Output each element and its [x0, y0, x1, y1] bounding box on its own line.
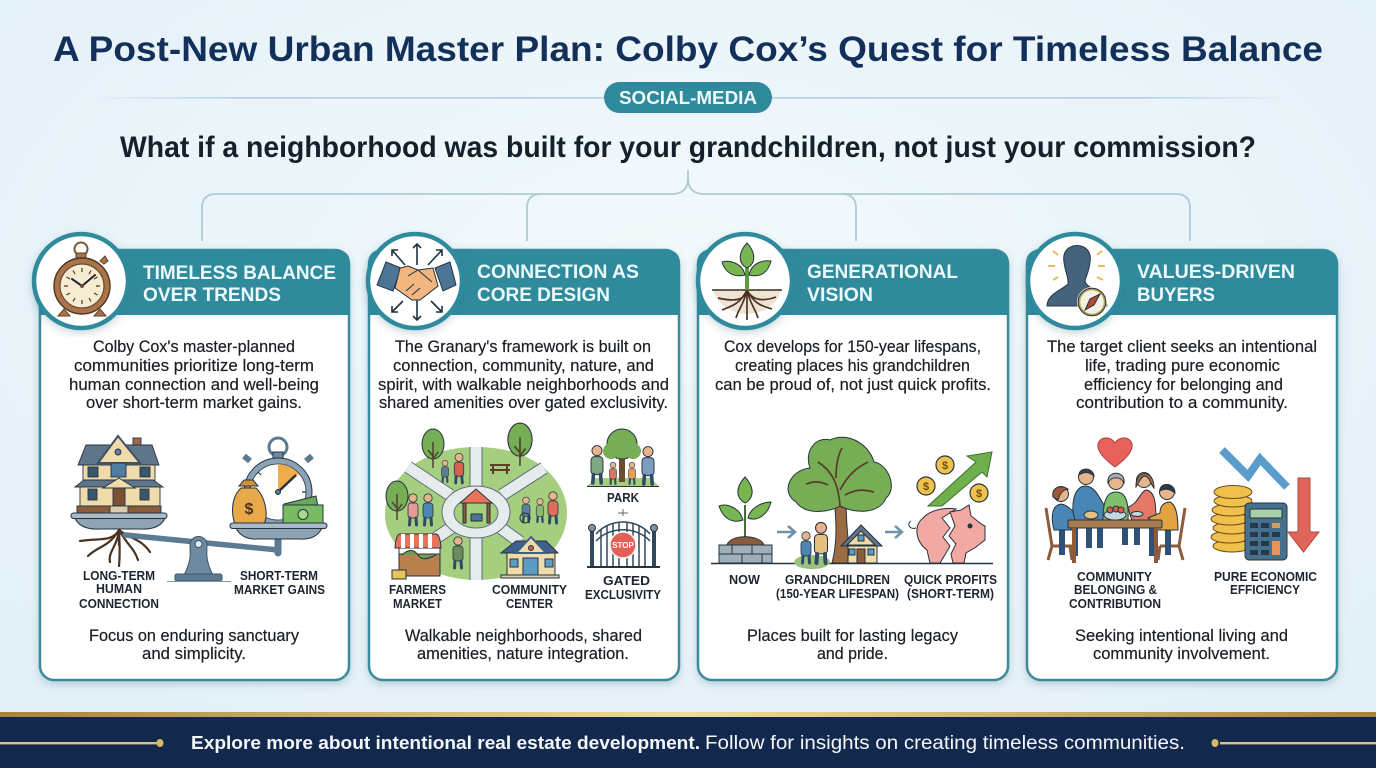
chairs [1046, 508, 1185, 560]
map labels: CENTER [506, 597, 553, 611]
tag pill: social-media: SOCIAL-MEDIA [619, 88, 757, 108]
panel heading: OVER TRENDS [143, 284, 281, 306]
description: Cox develops for 150-year lifespans, [724, 338, 981, 356]
panel heading: GENERATIONAL [807, 261, 958, 283]
description: The Granary's framework is built on [395, 338, 651, 356]
icon: pocket clock [34, 234, 128, 328]
description: efficiency for belonging and [1084, 376, 1283, 394]
seated people [1052, 469, 1178, 556]
panel header [368, 250, 680, 315]
trees, bench [422, 429, 444, 468]
heart [1098, 438, 1132, 467]
panel takeaway [747, 627, 959, 663]
description: The target client seeks an intentional [1047, 338, 1317, 356]
panel heading [477, 261, 639, 306]
stopwatch [244, 438, 312, 526]
panel takeaway: Places built for lasting legacy [747, 627, 959, 645]
panel takeaway: and simplicity. [142, 645, 246, 663]
description: human connection and well-being [69, 376, 319, 394]
timeline labels: GRANDCHILDREN [785, 573, 890, 587]
people on the green [408, 453, 558, 568]
gazebo [460, 489, 492, 523]
description: can be proud of, not just quick profits. [715, 376, 991, 394]
tag pill: social-media [90, 82, 1290, 113]
calculator [1245, 503, 1287, 560]
panel heading: CONNECTION AS [477, 261, 639, 283]
panel heading: CORE DESIGN [477, 284, 610, 306]
panel takeaway [1075, 627, 1288, 663]
description: spirit, with walkable neighborhoods and [378, 376, 669, 394]
description: connection, community, nature, and [393, 357, 654, 375]
illustration: community table vs economic efficiency [1046, 438, 1319, 611]
scale labels [79, 569, 325, 611]
panel takeaway: Walkable neighborhoods, shared [405, 627, 642, 645]
panel takeaway [89, 627, 300, 663]
map labels: GATED [603, 573, 650, 588]
panel header [1026, 250, 1338, 315]
house on left pan [75, 436, 163, 513]
broken piggy bank [909, 505, 985, 563]
map labels: MARKET [393, 597, 442, 611]
timeline labels: NOW [729, 573, 760, 587]
gate with stop sign [587, 522, 660, 567]
icon: handshake with arrows [368, 234, 462, 328]
timeline labels: (SHORT-TERM) [907, 587, 994, 601]
scale labels: SHORT-TERM [240, 569, 318, 583]
panel takeaway: Seeking intentional living and [1075, 627, 1288, 645]
question heading: What if a neighborhood was built for your grandchildren, not just your commission? [120, 131, 1256, 164]
panel heading [807, 261, 958, 306]
description [715, 338, 991, 394]
connector lines to the four cards [202, 170, 1190, 241]
map labels [389, 573, 662, 611]
right pan [274, 539, 282, 553]
illustration: now to grandchildren timeline [711, 437, 997, 601]
icon: sprout with roots [698, 234, 792, 328]
panel header [39, 250, 350, 315]
comparison labels: CONTRIBUTION [1069, 597, 1161, 611]
title: A Post-New Urban Master Plan: Colby Cox’s Quest for Timeless Balance [53, 30, 1323, 69]
panel: timeless balance over trends [34, 234, 350, 680]
description: contribution to a community. [1076, 394, 1288, 412]
footer banner [0, 712, 1376, 768]
roads and roundabout [408, 447, 544, 580]
panel: generational vision [697, 234, 1009, 680]
farmers market stall [392, 534, 441, 579]
beam and fulcrum [125, 535, 278, 550]
panel heading: TIMELESS BALANCE [143, 262, 336, 284]
panel heading [1137, 261, 1295, 306]
community center building [501, 537, 559, 578]
scale labels: LONG-TERM [83, 569, 155, 583]
gate with stop sign: STOP [612, 541, 634, 550]
comparison labels: BELONGING & [1074, 583, 1157, 597]
panel heading: BUYERS [1137, 284, 1215, 306]
map labels: COMMUNITY [492, 583, 568, 597]
timeline labels [729, 573, 997, 601]
panel takeaway: and pride. [817, 645, 888, 663]
money bag: $ [245, 501, 254, 518]
description: shared amenities over gated exclusivity. [379, 394, 668, 412]
large tree with family and house [788, 437, 891, 569]
sprout in planter [719, 477, 772, 563]
description [1047, 338, 1317, 412]
illustration: balance scale with house and stopwatch [71, 436, 327, 611]
park vignette [587, 429, 659, 486]
call to action: Explore more about intentional real estate development. [191, 732, 700, 753]
description: communities prioritize long-term [74, 357, 314, 375]
panel takeaway: community involvement. [1093, 645, 1270, 663]
comparison labels: COMMUNITY [1077, 570, 1153, 584]
comparison labels [1069, 570, 1317, 611]
description: life, trading pure economic [1085, 357, 1280, 375]
description [69, 338, 319, 412]
scale labels: CONNECTION [79, 597, 159, 611]
comparison labels: PURE ECONOMIC [1214, 570, 1317, 584]
coins and rising arrow [928, 452, 992, 506]
timeline labels: (150-YEAR LIFESPAN) [776, 587, 899, 601]
arrow [777, 526, 795, 538]
panel: connection as core design [368, 234, 680, 680]
description: over short-term market gains. [86, 394, 302, 412]
description [378, 338, 669, 412]
map labels: FARMERS [389, 583, 446, 597]
icon: person with compass [1028, 234, 1122, 328]
panel heading [143, 262, 336, 306]
description: Colby Cox's master-planned [93, 338, 295, 356]
comparison labels: EFFICIENCY [1230, 583, 1301, 597]
illustration: walkable neighborhood map: PARK [607, 491, 639, 505]
panel header [697, 250, 1009, 315]
illustration: walkable neighborhood map [385, 423, 662, 611]
money bag [232, 480, 266, 524]
panel heading: VISION [807, 284, 873, 306]
declining zigzag line [1222, 450, 1287, 487]
panel takeaway [405, 627, 642, 663]
scale labels: HUMAN [96, 582, 142, 596]
arrow [885, 526, 902, 538]
panel: values-driven buyers [1026, 234, 1338, 680]
cash stack [283, 496, 323, 524]
panel takeaway: amenities, nature integration. [417, 645, 629, 663]
map labels: EXCLUSIVITY [585, 588, 662, 602]
panel heading: VALUES-DRIVEN [1137, 261, 1295, 283]
panel takeaway: Focus on enduring sanctuary [89, 627, 300, 645]
table with food [1068, 506, 1162, 563]
description: creating places his grandchildren [735, 357, 970, 375]
left pan and roots [80, 528, 150, 566]
red down arrow [1288, 478, 1319, 552]
coin stack [1211, 486, 1252, 552]
call to action: Follow for insights on creating timeless communities. [705, 732, 1185, 754]
scale labels: MARKET GAINS [234, 583, 325, 597]
timeline labels: QUICK PROFITS [904, 573, 997, 587]
